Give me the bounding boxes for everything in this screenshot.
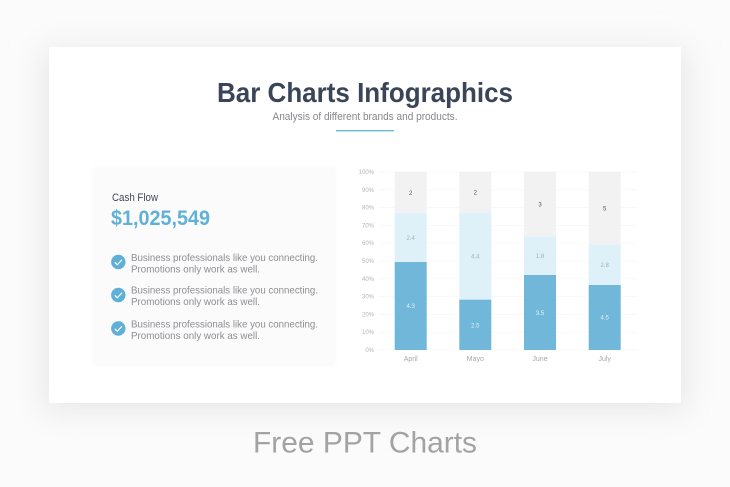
bar: June: 3 bbox=[538, 202, 542, 208]
y axis labels: 0% bbox=[365, 348, 375, 354]
icon: check 1 bbox=[111, 255, 126, 269]
bullet text 1: Business professionals like you connecting. bbox=[131, 252, 318, 264]
x axis labels: April bbox=[404, 356, 418, 363]
y axis labels: 90% bbox=[362, 188, 375, 194]
x axis labels: June bbox=[532, 356, 548, 363]
bar: June: 1.8 bbox=[536, 254, 545, 260]
bar: June bbox=[524, 172, 556, 350]
bar: July: 2.8 bbox=[601, 263, 610, 269]
bar: June: 3.5 bbox=[536, 311, 545, 317]
bar: April: 4.3 bbox=[407, 304, 416, 310]
icon: check 3 bbox=[111, 321, 126, 336]
y axis labels: 100% bbox=[359, 170, 375, 176]
y axis labels bbox=[359, 170, 375, 354]
bullet text 3: Promotions only work as well. bbox=[131, 330, 260, 342]
cash flow label: Cash Flow bbox=[112, 192, 158, 204]
bar: July bbox=[589, 172, 621, 350]
y axis labels: 30% bbox=[362, 295, 375, 301]
bar: April bbox=[395, 172, 427, 350]
y axis labels: 70% bbox=[362, 223, 375, 229]
bar: July: 5 bbox=[603, 206, 607, 212]
bullet text 2: Business professionals like you connecting. bbox=[131, 284, 318, 296]
bar: July: 4.5 bbox=[601, 316, 610, 322]
panel: cash flow bbox=[94, 168, 334, 364]
y axis labels: 50% bbox=[362, 259, 375, 265]
y axis labels: 60% bbox=[362, 241, 375, 247]
bullet text 1: Promotions only work as well. bbox=[131, 264, 260, 276]
bar: Mayo: 4.4 bbox=[471, 254, 480, 260]
x axis labels bbox=[404, 356, 611, 363]
y axis labels: 10% bbox=[362, 330, 375, 336]
bullet text 2: Promotions only work as well. bbox=[131, 296, 260, 308]
bar: Mayo bbox=[459, 172, 491, 350]
cash flow amount: $1,025,549 bbox=[111, 207, 210, 230]
icon: check 2 bbox=[111, 288, 126, 302]
footer caption: Free PPT Charts bbox=[253, 426, 477, 460]
bar: Mayo: 2 bbox=[474, 190, 478, 196]
x axis labels: July bbox=[598, 356, 611, 363]
stacked bar chart bbox=[359, 170, 637, 363]
title: Bar Charts Infographics bbox=[217, 77, 513, 108]
bar: April: 2 bbox=[409, 191, 413, 197]
slide card bbox=[49, 47, 681, 403]
title underline bbox=[336, 130, 394, 131]
x axis labels: Mayo bbox=[467, 356, 484, 363]
y axis labels: 40% bbox=[362, 277, 375, 283]
y axis labels: 80% bbox=[362, 206, 375, 212]
bar: April: 2.4 bbox=[407, 236, 416, 242]
bullet text 3: Business professionals like you connecting. bbox=[131, 318, 318, 330]
y axis labels: 20% bbox=[362, 312, 375, 318]
subtitle: Analysis of different brands and products. bbox=[272, 111, 458, 123]
bar: Mayo: 2.5 bbox=[471, 324, 480, 330]
